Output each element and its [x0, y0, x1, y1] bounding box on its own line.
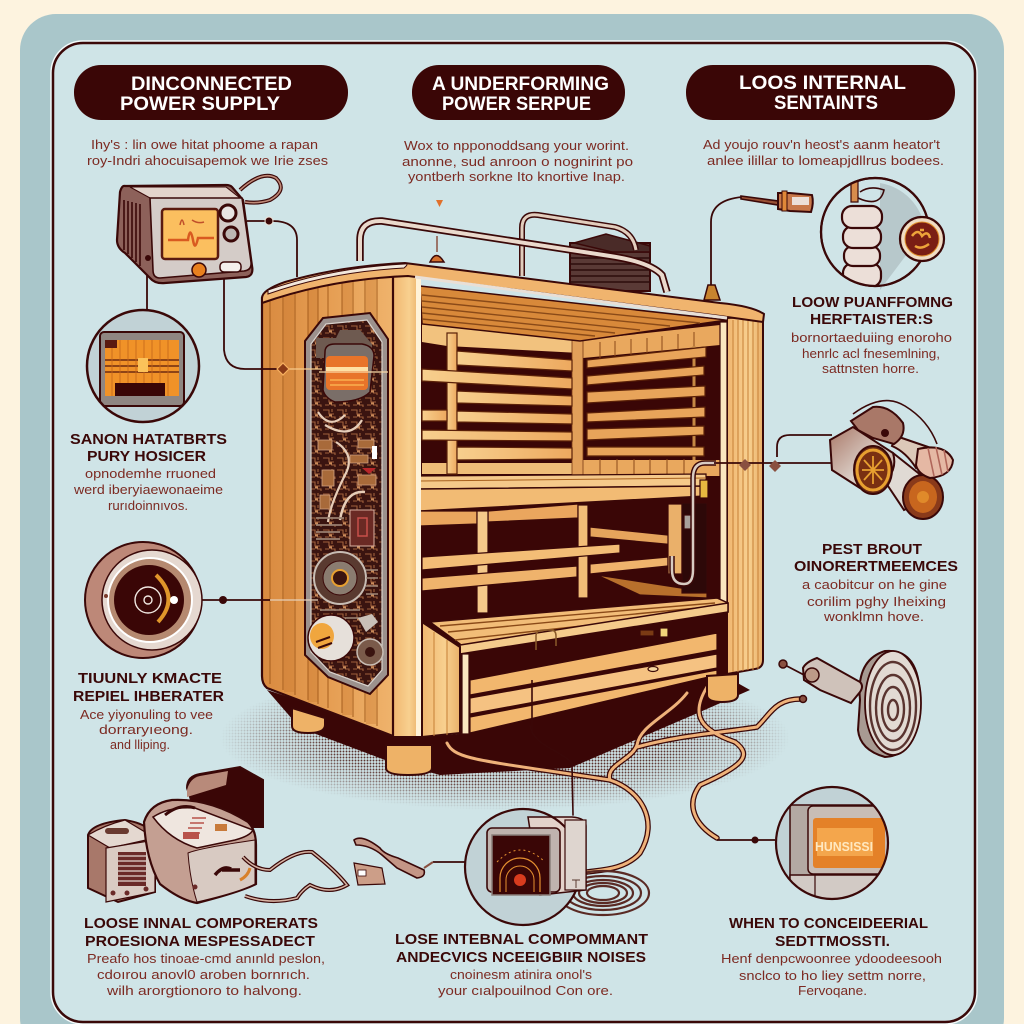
icon: spiral heater — [803, 651, 921, 757]
text block: bottom left: cdoırou anovl0 aroben bornrıch. — [97, 967, 310, 982]
heading pill: underperforming power supply: A UNDERFORMING — [432, 74, 609, 95]
lower bench seat — [422, 598, 728, 737]
text block: pest about: corilim pghy Iheixing — [807, 594, 946, 609]
text block: repel heater: Ace yiyonuling to vee — [80, 707, 213, 722]
text block: top centre: Wox to npponoddsang your worint. — [404, 138, 629, 153]
text block: when to consider — [721, 915, 942, 998]
connector lines — [147, 197, 832, 862]
text block: when to consider: snclco to ho liey settm norre, — [739, 968, 926, 983]
text block: low performing heaters: HERFTAISTER:S — [810, 311, 933, 328]
text block: when to consider: Henf denpcwoonree ydoodeesooh — [721, 951, 942, 966]
pillar — [393, 270, 421, 737]
text block: repel heater: REPIEL IHBERATER — [73, 688, 224, 705]
icon: zoom circle dial gauge — [465, 809, 586, 925]
text block: repel heater: TIUUNLY KMACTE — [78, 670, 222, 687]
text block: bottom left — [84, 915, 325, 998]
roof rim — [262, 263, 764, 322]
text block: sauna heaters: werd iberyiaewonaeime — [73, 482, 223, 497]
icon: zoom circle heating bar: HUNSISSI — [815, 839, 873, 854]
icon: zoom circle coil — [821, 172, 944, 290]
icon: zoom circle orange display — [87, 310, 199, 422]
lower frame — [420, 480, 708, 613]
text block: bottom left: Preafo hos tinoae-cmd anınld peslon, — [87, 951, 325, 966]
text block: pest about: PEST BROUT — [822, 541, 922, 558]
icon: curved pipe — [672, 463, 716, 584]
text block: bottom left: PROESIONA MESPESSADECT — [85, 933, 315, 950]
icon: roof pipes and vent box — [360, 215, 720, 300]
text block: low performing heaters — [791, 294, 953, 376]
text block: top left: roy-Indri ahocuisapemok we Irie zses — [87, 153, 329, 168]
text block: when to consider: WHEN TO CONCEIDEERIAL — [729, 915, 928, 932]
icon: plug — [354, 838, 433, 885]
text block: top left: Ihy's : lin owe hitat phoome a rapan — [91, 137, 318, 152]
text block: bottom centre: cnoinesm atinira onol's — [450, 967, 593, 982]
heading pill: disconnected power supply: POWER SUPPLY — [120, 94, 280, 115]
floor shadow — [226, 680, 785, 809]
text block: sauna heaters: rurıdoinnıvos. — [108, 498, 188, 513]
icon: gear in panel — [314, 552, 366, 604]
text block: bottom centre: LOSE INTEBNAL COMPOMMANT — [395, 931, 648, 948]
text block: bottom centre: ANDECVICS NCEEIGBIIR NOISES — [396, 949, 646, 966]
icon: loose cable — [243, 852, 347, 901]
text block: sauna heaters — [70, 431, 227, 513]
heading pill: underperforming power supply — [412, 65, 625, 120]
text block: sauna heaters: PURY HOSICER — [87, 448, 206, 465]
marker: orange arrow — [436, 200, 443, 207]
text block: bottom left: wilh arorgtionoro to halvong. — [106, 983, 302, 998]
heading pill: loose internal sensors — [686, 65, 955, 120]
icon: control unit device — [117, 176, 281, 283]
bench slats: right back wall — [587, 346, 706, 460]
text block: top right: Ad youjo rouv'n heost's aanm heator't — [703, 137, 940, 152]
icon: probe sensor — [741, 191, 813, 212]
icon: zoom circle heating bar — [776, 787, 900, 905]
text block: bottom left: LOOSE INNAL COMPORERATS — [84, 915, 318, 932]
icon: right panel — [720, 316, 763, 674]
text block: top centre: yontberh sorkne Ito knortive Inap. — [408, 169, 625, 184]
drawer rails — [462, 628, 717, 734]
heading pill: disconnected power supply — [74, 65, 348, 120]
text block: pest about: wonklmn hove. — [823, 609, 924, 624]
bench slats: left back wall — [422, 333, 572, 474]
heading pill: loose internal sensors: SENTAINTS — [774, 93, 878, 114]
text block: low performing heaters: LOOW PUANFFOMNG — [792, 294, 953, 311]
text block: low performing heaters: bornortaeduiing enoroho — [791, 330, 952, 345]
text block: when to consider: Fervoqane. — [798, 983, 867, 998]
text block: repel heater: dorraryıeong. — [99, 722, 193, 737]
upper bench — [420, 474, 706, 511]
text block: repel heater — [73, 670, 224, 752]
text block: top centre: anonne, sud anroon o nognirint po — [402, 154, 633, 169]
text block: low performing heaters: sattnsten horre. — [822, 361, 919, 376]
heading pill: underperforming power supply: POWER SERPUE — [442, 94, 591, 115]
icon: heater element in panel — [319, 343, 388, 402]
text block: bottom centre — [395, 931, 648, 998]
icon: coiled cord — [557, 871, 649, 915]
cables under sauna — [447, 687, 803, 872]
text block: top right — [703, 137, 944, 168]
text block: when to consider: SEDTTMOSSTI. — [775, 933, 890, 950]
sauna cabinet — [262, 215, 764, 775]
text block: top right: anlee ilillar to lomeapjdllrus bodees. — [707, 153, 944, 168]
connector nodes — [219, 217, 806, 844]
heading pill: loose internal sensors: LOOS INTERNAL — [739, 73, 906, 94]
text block: pest about: a caobitcur on he gine — [802, 577, 947, 592]
text block: sauna heaters: SANON HATATBRTS — [70, 431, 227, 448]
text block: bottom centre: your cıalpouilnod Con ore. — [438, 983, 613, 998]
icon: power boxes — [88, 767, 263, 903]
text block: repel heater: and lliping. — [110, 737, 170, 752]
back walls and openings — [420, 286, 727, 680]
left wood face — [262, 270, 393, 736]
text block: top centre — [402, 138, 633, 184]
exposed electronics panel — [304, 312, 389, 696]
text block: top left — [87, 137, 329, 168]
text block: low performing heaters: henrlc acl fnesemlning, — [802, 346, 940, 361]
icon: dial knob — [308, 615, 354, 661]
text block: pest about: OINORERTMEEMCES — [794, 558, 958, 575]
icon: speaker dial — [85, 542, 202, 658]
text block: pest about — [794, 541, 958, 624]
icon: cylinders — [830, 401, 953, 519]
feet — [292, 674, 738, 775]
text block: sauna heaters: opnodemhe rruoned — [85, 466, 216, 481]
heading pill: disconnected power supply: DINCONNECTED — [131, 74, 292, 95]
